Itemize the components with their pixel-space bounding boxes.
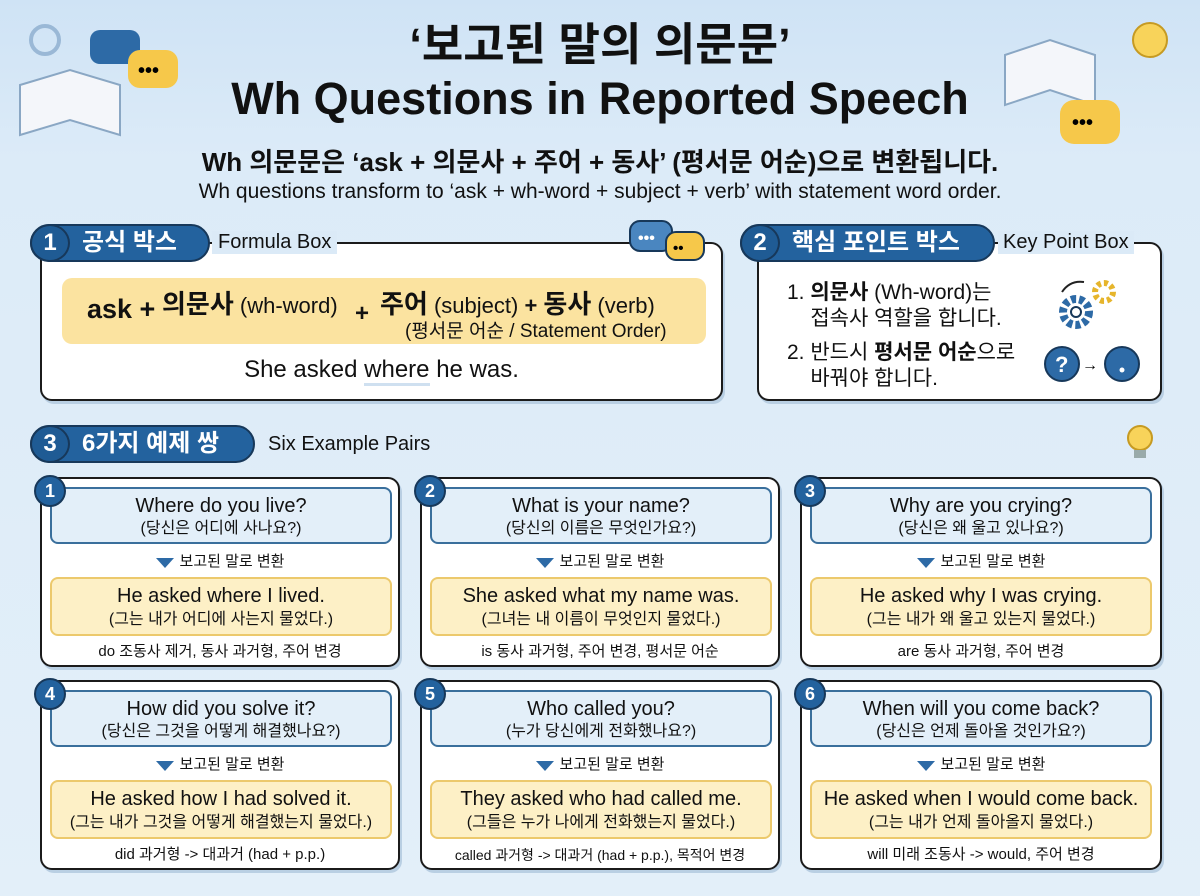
card 1: (그는 내가 어디에 사는지 물었다.) — [109, 611, 333, 628]
card 1 — [40, 477, 400, 667]
icon: question to period: → — [1082, 357, 1098, 374]
card 4: (당신은 그것을 어떻게 해결했나요?) — [102, 723, 340, 740]
pill: formula box: 1 — [43, 229, 57, 256]
card 6: He asked when I would come back. — [824, 788, 1138, 810]
card 3: He asked why I was crying. — [860, 585, 1102, 607]
card 1: 보고된 말로 변환 — [180, 553, 284, 570]
formula bar — [62, 278, 706, 344]
subtitle english: Wh questions transform to ‘ask + wh-word + subject + verb’ with statement word order. — [199, 180, 1001, 203]
key points text: 1. 의문사 (Wh-word)는 — [787, 281, 991, 304]
card 6: (당신은 언제 돌아올 것인가요?) — [876, 723, 1086, 740]
title — [231, 19, 969, 124]
card 1: 1 — [45, 481, 55, 501]
card 5: They asked who had called me. — [460, 788, 742, 810]
formula bar: + — [355, 300, 369, 327]
label: Six Example Pairs: Six Example Pairs — [268, 433, 430, 455]
card 6 — [800, 680, 1162, 870]
title: ‘보고된 말의 의문문’ — [409, 19, 791, 70]
card 3: Why are you crying? — [890, 495, 1072, 517]
card 3: 보고된 말로 변환 — [941, 553, 1045, 570]
card 5: (누가 당신에게 전화했나요?) — [506, 723, 696, 740]
formula bar: 의문사 (wh-word) — [162, 289, 338, 319]
card 4: 보고된 말로 변환 — [180, 756, 284, 773]
card 1: (당신은 어디에 사나요?) — [141, 520, 301, 537]
formula bar: ask + — [87, 294, 155, 324]
card 5 — [420, 680, 780, 870]
card 6: (그는 내가 언제 돌아올지 물었다.) — [869, 814, 1093, 831]
card 4: did 과거형 -> 대과거 (had + p.p.) — [115, 846, 325, 863]
card 3: (그는 내가 왜 울고 있는지 물었다.) — [867, 611, 1095, 628]
panel: key point box — [757, 242, 1162, 401]
card 6: 보고된 말로 변환 — [941, 756, 1045, 773]
panel: formula box — [40, 242, 723, 401]
card 3: 3 — [805, 481, 815, 501]
card 4: (그는 내가 그것을 어떻게 해결했는지 물었다.) — [70, 814, 372, 831]
card 2: is 동사 과거형, 주어 변경, 평서문 어순 — [481, 643, 719, 660]
label: Key Point Box: Key Point Box — [1003, 231, 1129, 253]
subtitle: Wh 의문문은 ‘ask + 의문사 + 주어 + 동사’ (평서문 어순)으로 변환됩니다. — [202, 147, 998, 177]
key points text: 바꿔야 합니다. — [810, 367, 938, 390]
card 3: are 동사 과거형, 주어 변경 — [898, 643, 1064, 660]
card 1: Where do you live? — [135, 495, 307, 517]
title: Wh Questions in Reported Speech — [231, 73, 969, 124]
card 3: (당신은 왜 울고 있나요?) — [898, 520, 1064, 537]
card 4: He asked how I had solved it. — [90, 788, 352, 810]
card 6: When will you come back? — [863, 698, 1099, 720]
pill: key point box — [740, 224, 995, 262]
card 5: (그들은 누가 나에게 전화했는지 물었다.) — [467, 814, 735, 831]
card 2: (그녀는 내 이름이 무엇인지 물었다.) — [482, 611, 720, 628]
formula bar: 주어 (subject) + 동사 (verb) — [380, 289, 655, 319]
key points text: 접속사 역할을 합니다. — [810, 307, 1002, 330]
card 2 — [420, 477, 780, 667]
card 5: called 과거형 -> 대과거 (had + p.p.), 목적어 변경 — [455, 847, 745, 863]
icon: question to period — [1044, 346, 1140, 382]
card 5: 5 — [425, 684, 435, 704]
formula bar: (평서문 어순 / Statement Order) — [405, 321, 667, 342]
pill: key point box: 2 — [753, 229, 767, 256]
card 6: 6 — [805, 684, 815, 704]
card 2: 보고된 말로 변환 — [560, 553, 664, 570]
card 6: will 미래 조동사 -> would, 주어 변경 — [867, 846, 1095, 863]
card 4: How did you solve it? — [126, 698, 315, 720]
example sentence: She asked where he was. — [244, 356, 519, 383]
card 3 — [800, 477, 1162, 667]
card 1: do 조동사 제거, 동사 과거형, 주어 변경 — [98, 643, 342, 660]
icon: book and bulbs right: ••• — [1072, 112, 1093, 134]
card 4: 4 — [45, 684, 55, 704]
pill: six example pairs: 3 — [43, 430, 57, 457]
key points text — [787, 281, 1015, 390]
pill: six example pairs: 6가지 예제 쌍 — [82, 430, 219, 457]
card 2: She asked what my name was. — [463, 585, 739, 607]
icon: question to period: ? — [1055, 352, 1068, 377]
key points text: 2. 반드시 평서문 어순으로 — [787, 341, 1015, 364]
card 5: Who called you? — [527, 698, 675, 720]
icon: bulb — [1127, 425, 1153, 458]
card 1: He asked where I lived. — [117, 585, 325, 607]
icon: chat bubbles: •• — [673, 240, 684, 257]
pill: six example pairs — [30, 425, 255, 463]
pill: formula box: 공식 박스 — [82, 229, 177, 256]
icon: book and bulbs right — [1004, 22, 1168, 144]
card 2: (당신의 이름은 무엇인가요?) — [506, 520, 696, 537]
icon: gears — [1059, 280, 1116, 329]
pill: key point box: 핵심 포인트 박스 — [792, 229, 960, 256]
pill: formula box — [30, 224, 210, 262]
card 5: 보고된 말로 변환 — [560, 756, 664, 773]
card 2: What is your name? — [512, 495, 690, 517]
icon: chat bubbles — [629, 220, 705, 261]
card 2: 2 — [425, 481, 435, 501]
label: Formula Box: Formula Box — [218, 231, 331, 253]
icon: chat bubbles: ••• — [638, 230, 655, 247]
card 4 — [40, 680, 400, 870]
icon: books and bubbles left: ••• — [138, 60, 159, 82]
icon: books and bubbles left — [19, 24, 178, 136]
